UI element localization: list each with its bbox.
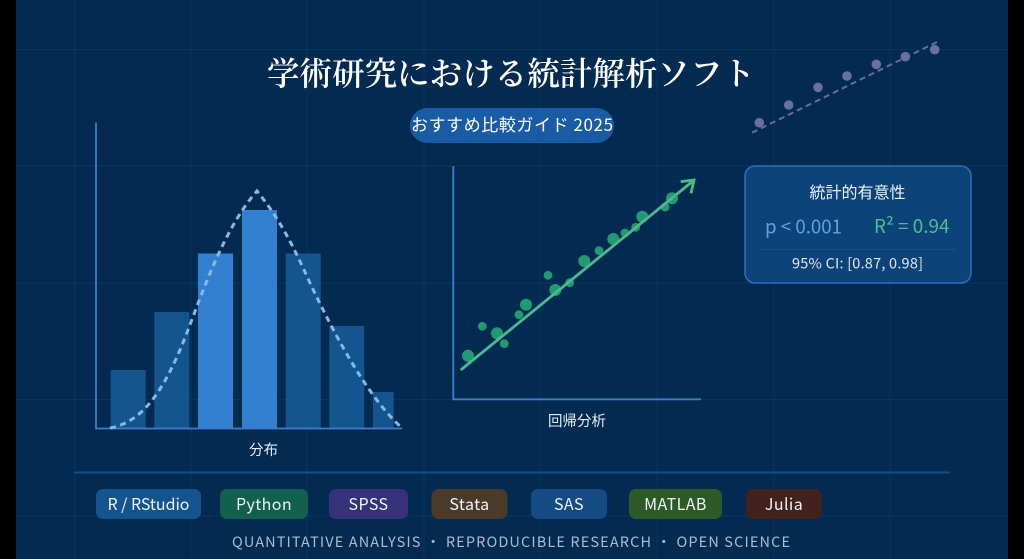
tag: SAS (531, 489, 607, 519)
histogram label: 分布 (249, 439, 278, 460)
tag: Stata: Stata (449, 491, 490, 515)
histogram bars (111, 210, 394, 428)
tag: MATLAB: MATLAB (644, 491, 707, 515)
tag: Python (220, 489, 308, 519)
regression chart (453, 166, 701, 431)
p value: p < 0.001 (765, 212, 842, 240)
tag: SPSS: SPSS (349, 491, 388, 515)
regression label: 回帰分析 (548, 410, 606, 431)
histogram chart (96, 122, 402, 460)
normal distribution curve (110, 191, 402, 428)
confidence interval: 95% CI: [0.87, 0.98] (792, 252, 923, 274)
tag: Python: Python (236, 491, 292, 515)
tag: R / RStudio (96, 489, 201, 519)
tag: Julia: Julia (765, 491, 803, 515)
card heading: 統計的有意性 (809, 179, 906, 203)
regression arrow (461, 180, 694, 370)
footer tagline: QUANTITATIVE ANALYSIS ・ REPRODUCIBLE RESEARCH ・ OPEN SCIENCE (232, 531, 790, 552)
tag: MATLAB (629, 489, 722, 519)
tag: SPSS (329, 489, 408, 519)
decorative trend scatter (752, 41, 940, 133)
r squared value: R² = 0.94 (874, 212, 950, 239)
statistical significance card (745, 166, 971, 283)
scatter points (462, 192, 678, 362)
title: 学術研究における統計解析ソフト (267, 49, 755, 95)
subtitle badge: おすすめ比較ガイド 2025 (411, 111, 613, 136)
histogram axes (96, 122, 402, 428)
tag: Stata (432, 489, 508, 519)
regression axes (453, 166, 701, 399)
software tags (96, 489, 822, 519)
tag: R / RStudio: R / RStudio (108, 491, 190, 515)
tag: SAS: SAS (554, 491, 584, 515)
tag: Julia (746, 489, 822, 519)
